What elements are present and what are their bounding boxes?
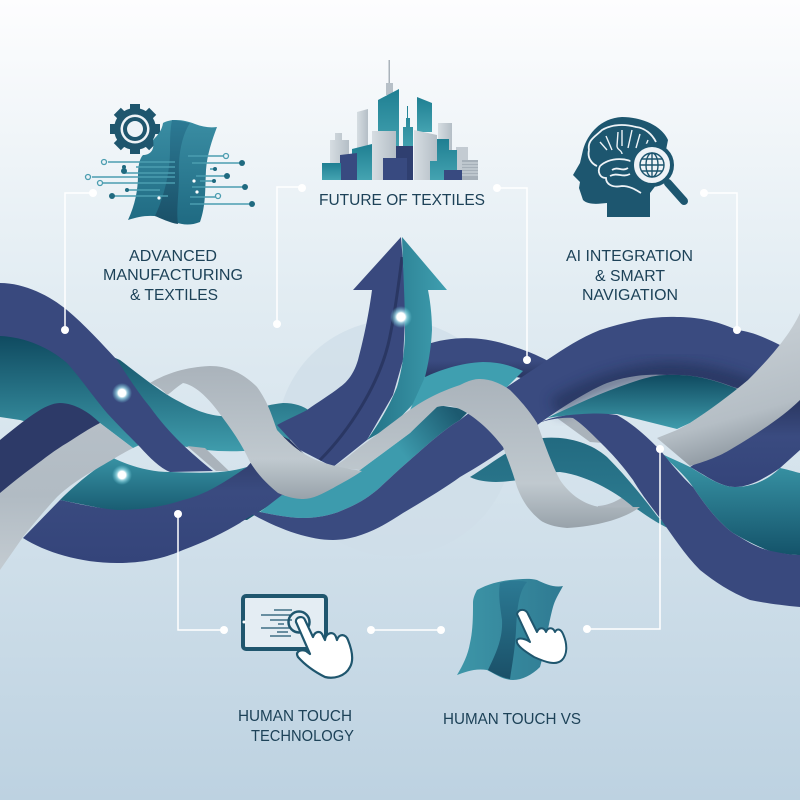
grey thin strip behind right: [557, 417, 603, 443]
arrow inner dark strand: [320, 257, 402, 460]
globe: [640, 153, 664, 177]
label: ai integration: NAVIGATION: [582, 287, 678, 304]
circuit lines: [92, 156, 252, 204]
teal band right of arrow: [410, 362, 523, 410]
icon: head with magnifier: [573, 117, 684, 217]
label: advanced manufacturing: ADVANCED: [129, 248, 217, 265]
grey right ribbon: [657, 313, 800, 466]
grey tail right: [598, 492, 642, 520]
glowing nodes: [112, 306, 412, 485]
label: human touch technology: TECHNOLOGY: [251, 728, 354, 745]
navy bottom ribbon: [23, 433, 310, 563]
teal right big ribbon: [547, 375, 740, 429]
icon: fabric with touch: [457, 579, 566, 680]
label: human touch technology: HUMAN TOUCH: [238, 708, 352, 725]
brain outline: [589, 125, 656, 193]
navy lower left ribbon: [0, 403, 100, 495]
icon: tablet with touch: [242, 596, 352, 678]
icon: gear and circuit fabric: [86, 104, 255, 225]
connector dots: [61, 184, 741, 634]
navy right patch: [690, 395, 800, 487]
fabric fold: [155, 120, 190, 224]
grey left ribbon: [0, 423, 133, 570]
brain circuit: [600, 130, 648, 154]
label: ai integration: AI INTEGRATION: [566, 248, 693, 265]
grey middle ribbon left: [150, 366, 362, 499]
magnifier lens: [632, 145, 672, 185]
teal band lower centre: [260, 405, 470, 518]
hand: [517, 610, 566, 663]
grey middle ribbon right: [333, 379, 640, 528]
navy main ribbon upper left: [0, 283, 213, 472]
icon: city skyline: [322, 60, 478, 180]
ribbon shading: [555, 372, 760, 408]
teal ribbon upper left: [0, 336, 310, 451]
label: advanced manufacturing: MANUFACTURING: [103, 267, 243, 284]
grey thin strip behind centre: [187, 446, 229, 471]
woven ribbons: [0, 237, 800, 607]
navy big ribbon: [250, 317, 790, 540]
teal middle right ribbon: [470, 438, 672, 530]
circuit nodes: [86, 154, 255, 207]
label: advanced manufacturing: & TEXTILES: [130, 287, 218, 304]
gear: [110, 104, 160, 154]
label: ai integration: & SMART: [595, 268, 665, 285]
navy arrow strand block: [277, 237, 406, 467]
label: human touch technology: [238, 708, 354, 745]
label: ai integration: [566, 248, 693, 304]
heading: future of textiles: FUTURE OF TEXTILES: [319, 192, 485, 209]
label: human touch vs: HUMAN TOUCH VS: [443, 711, 581, 728]
fabric: [128, 120, 217, 225]
teal lower right ribbon: [660, 453, 800, 555]
navy back ribbon right of arrow: [425, 338, 550, 380]
magnifier handle: [668, 183, 684, 201]
navy lower right ribbon: [538, 414, 800, 607]
hand: [296, 617, 352, 678]
arrow teal half: [367, 237, 447, 440]
soft circle behind ribbons: [277, 320, 513, 556]
connector lines: [65, 187, 737, 630]
label: advanced manufacturing: [103, 248, 243, 304]
teal lower ribbon: [60, 450, 300, 520]
